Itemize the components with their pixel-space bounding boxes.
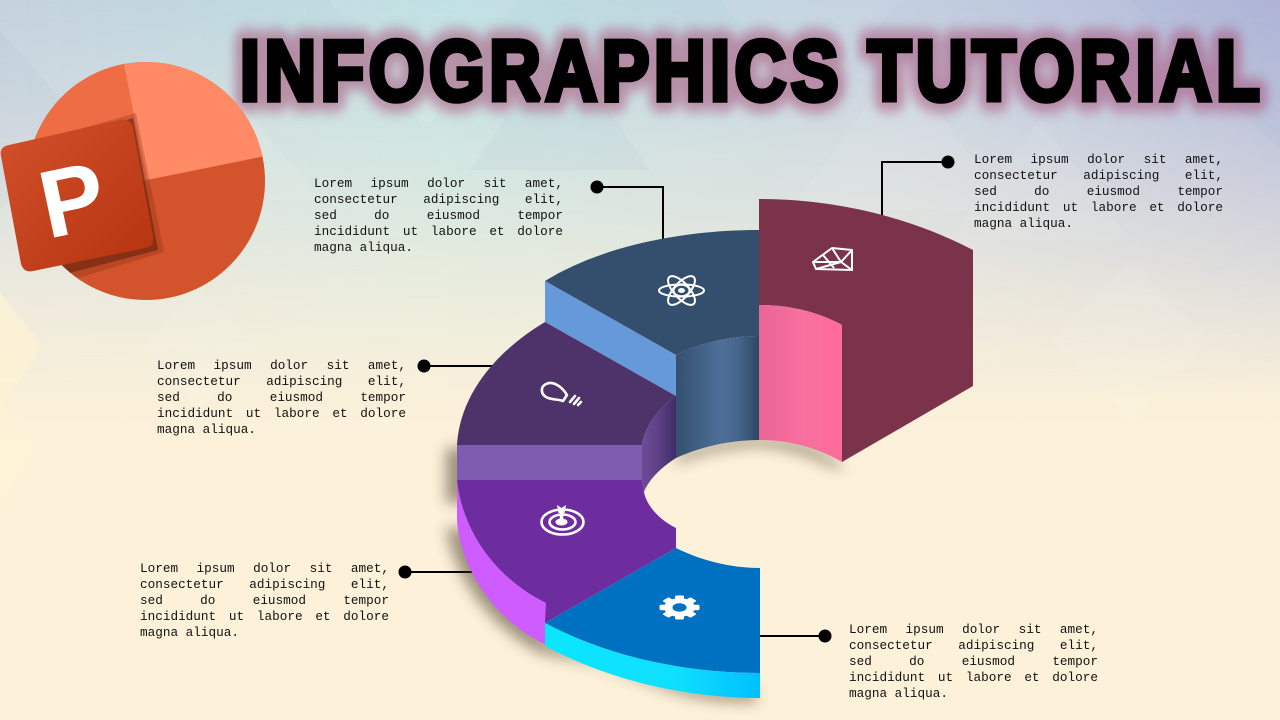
text block: lower left: sed do eiusmod tempor [140, 593, 389, 608]
text block: bottom right: Lorem ipsum dolor sit amet, [849, 622, 1098, 637]
text block: middle left: Lorem ipsum dolor sit amet, [157, 358, 406, 373]
text block: bottom right: magna aliqua. [849, 686, 948, 701]
icon: light bulb [542, 383, 581, 405]
navy side face [545, 281, 676, 396]
logo square [1, 120, 153, 271]
text block: middle left: sed do eiusmod tempor [157, 390, 406, 405]
text block: lower left: incididunt ut labore et dolore [140, 609, 389, 624]
title: INFOGRAPHICS TUTORIAL [240, 23, 1260, 118]
icon: diamond [813, 248, 852, 270]
text block: bottom right [849, 622, 1098, 701]
dark purple top face [457, 322, 676, 445]
text block: bottom right: incididunt ut labore et dolore [849, 670, 1098, 685]
background [0, 0, 1280, 380]
text block: middle left: consectetur adipiscing elit, [157, 374, 406, 389]
icon: PowerPoint logo [0, 62, 265, 300]
text block: top right [974, 152, 1223, 231]
purple side face [457, 480, 546, 645]
text block: top right: sed do eiusmod tempor [974, 184, 1223, 199]
blue top face [545, 548, 760, 673]
maroon top face [759, 199, 973, 462]
text block: bottom right: sed do eiusmod tempor [849, 654, 1098, 669]
drop shadows [446, 438, 842, 702]
title: INFOGRAPHICS TUTORIAL [240, 23, 1260, 118]
maroon inner wall [759, 305, 842, 462]
text block: top right: Lorem ipsum dolor sit amet, [974, 152, 1223, 167]
icon: atom [659, 273, 704, 308]
text block: top right: magna aliqua. [974, 216, 1073, 231]
text block: lower left: consectetur adipiscing elit, [140, 577, 389, 592]
blue side face [545, 623, 760, 698]
text block: top right: consectetur adipiscing elit, [974, 168, 1223, 183]
text block: top centre: incididunt ut labore et dolore [314, 224, 563, 239]
segment: purple [457, 480, 676, 645]
text block: lower left [140, 561, 389, 640]
logo letter: P [30, 141, 115, 259]
text block: lower left: Lorem ipsum dolor sit amet, [140, 561, 389, 576]
segment: maroon [759, 199, 973, 462]
text block: top centre: sed do eiusmod tempor [314, 208, 563, 223]
text block: top centre: consectetur adipiscing elit, [314, 192, 563, 207]
logo disc [34, 62, 265, 300]
segment: dark purple [457, 322, 676, 492]
text block: top centre: magna aliqua. [314, 240, 413, 255]
navy top face [545, 230, 759, 355]
text block: middle left: magna aliqua. [157, 422, 256, 437]
dark purple inner wall [642, 396, 676, 492]
icon: gear [660, 596, 700, 620]
connector lines [398, 156, 954, 642]
text block: top right: incididunt ut labore et dolore [974, 200, 1223, 215]
text block: top centre: Lorem ipsum dolor sit amet, [314, 176, 563, 191]
text block: lower left: magna aliqua. [140, 625, 239, 640]
segment: blue [545, 548, 760, 698]
segment: navy [545, 230, 759, 458]
text block: middle left: incididunt ut labore et dolore [157, 406, 406, 421]
text block: top centre [314, 176, 563, 255]
3D ring chart [446, 199, 973, 702]
dark purple side face [457, 445, 642, 480]
text block: bottom right: consectetur adipiscing elit, [849, 638, 1098, 653]
navy inner wall [676, 336, 759, 458]
text block: middle left [157, 358, 406, 437]
icon: target [542, 505, 584, 534]
purple top face [457, 480, 676, 623]
